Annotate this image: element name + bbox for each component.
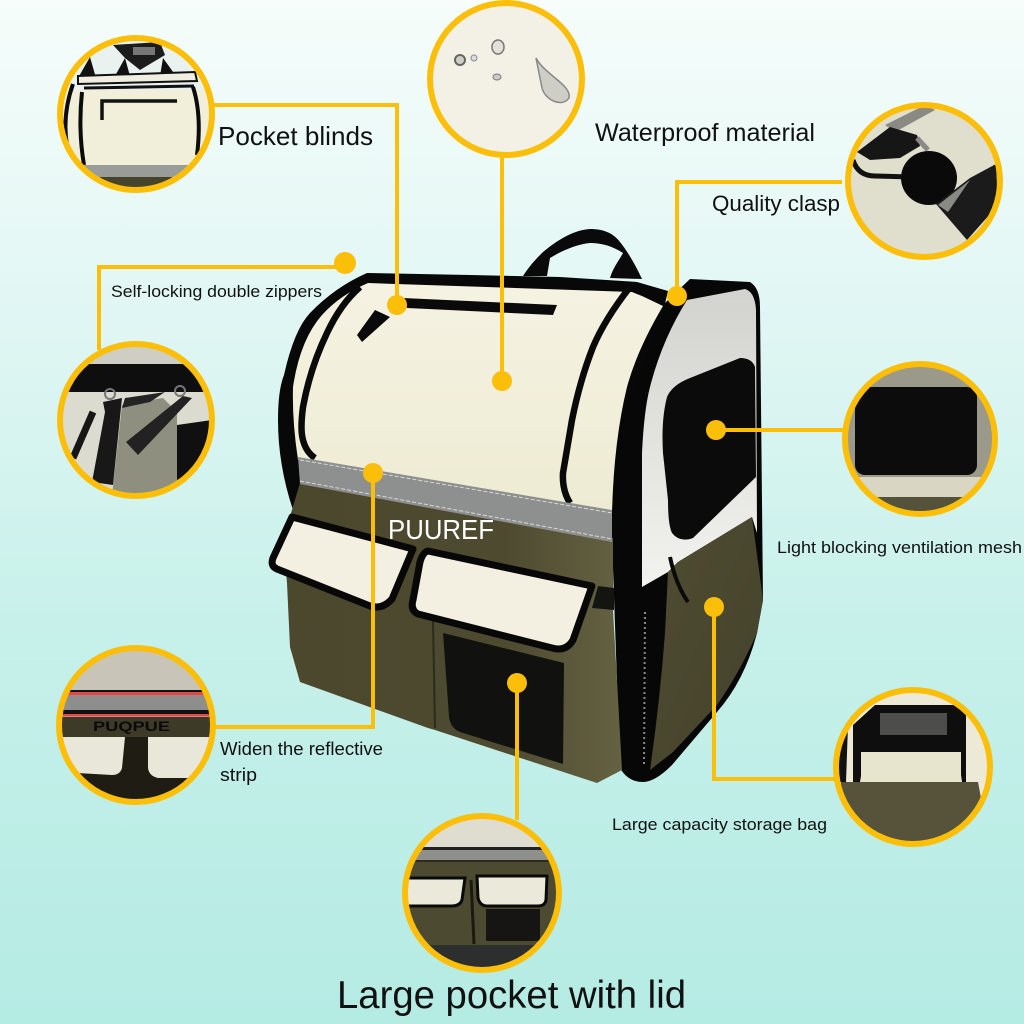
detail circle: self-locking zippers: [58, 342, 214, 498]
top handle: [523, 229, 642, 279]
detail circle: pocket with lid: [403, 814, 561, 972]
right pocket flap: [412, 551, 592, 649]
left pocket flap: [272, 517, 413, 607]
detail circle: ventilation mesh: [843, 362, 997, 517]
detail circle: quality clasp: [848, 105, 1000, 257]
front zipper pocket: [357, 298, 557, 342]
label: quality clasp: Quality clasp: [712, 191, 840, 216]
olive front body: [283, 483, 622, 783]
side white panel: [642, 289, 757, 587]
mesh pocket: [443, 633, 564, 764]
detail circle: reflective strip: PUQPUE: [93, 718, 170, 734]
pocket strap end: [592, 586, 614, 610]
front upper black outline: [278, 273, 668, 515]
label: widen the reflective strip: Widen the reflective: [220, 739, 383, 759]
label: waterproof material: Waterproof material: [595, 119, 815, 147]
label: pocket blinds: Pocket blinds: [218, 121, 373, 151]
side pocket strap: [670, 557, 688, 602]
detail circle: waterproof material: [430, 3, 582, 155]
label: widen the reflective strip: strip: [220, 765, 257, 785]
brand text: PUUREF: [388, 514, 494, 545]
side zipper teeth: [644, 612, 645, 765]
label: self-locking double zippers: Self-locking double zippers: [111, 282, 322, 301]
backpack product illustration: [272, 229, 763, 783]
label: light blocking ventilation mesh: Light blocking ventilation mesh: [777, 538, 1022, 557]
detail circle: pocket blinds: [58, 36, 214, 192]
reflective strip: [298, 457, 612, 542]
reflective stitching: [300, 460, 612, 539]
side body shell: [612, 279, 763, 782]
detail circle: reflective strip: [58, 647, 214, 803]
callout lines: [99, 105, 845, 820]
front pocket seam: [433, 620, 435, 728]
cream front panel: [293, 283, 663, 512]
front panel piping: [302, 287, 630, 503]
callout dots: [334, 252, 726, 693]
side ventilation mesh: [662, 358, 756, 540]
label: large capacity storage bag: Large capacity storage bag: [612, 815, 827, 834]
label: large pocket with lid: Large pocket with lid: [337, 974, 686, 1017]
detail circle: storage bag: [834, 688, 992, 846]
side olive pocket: [650, 517, 763, 770]
